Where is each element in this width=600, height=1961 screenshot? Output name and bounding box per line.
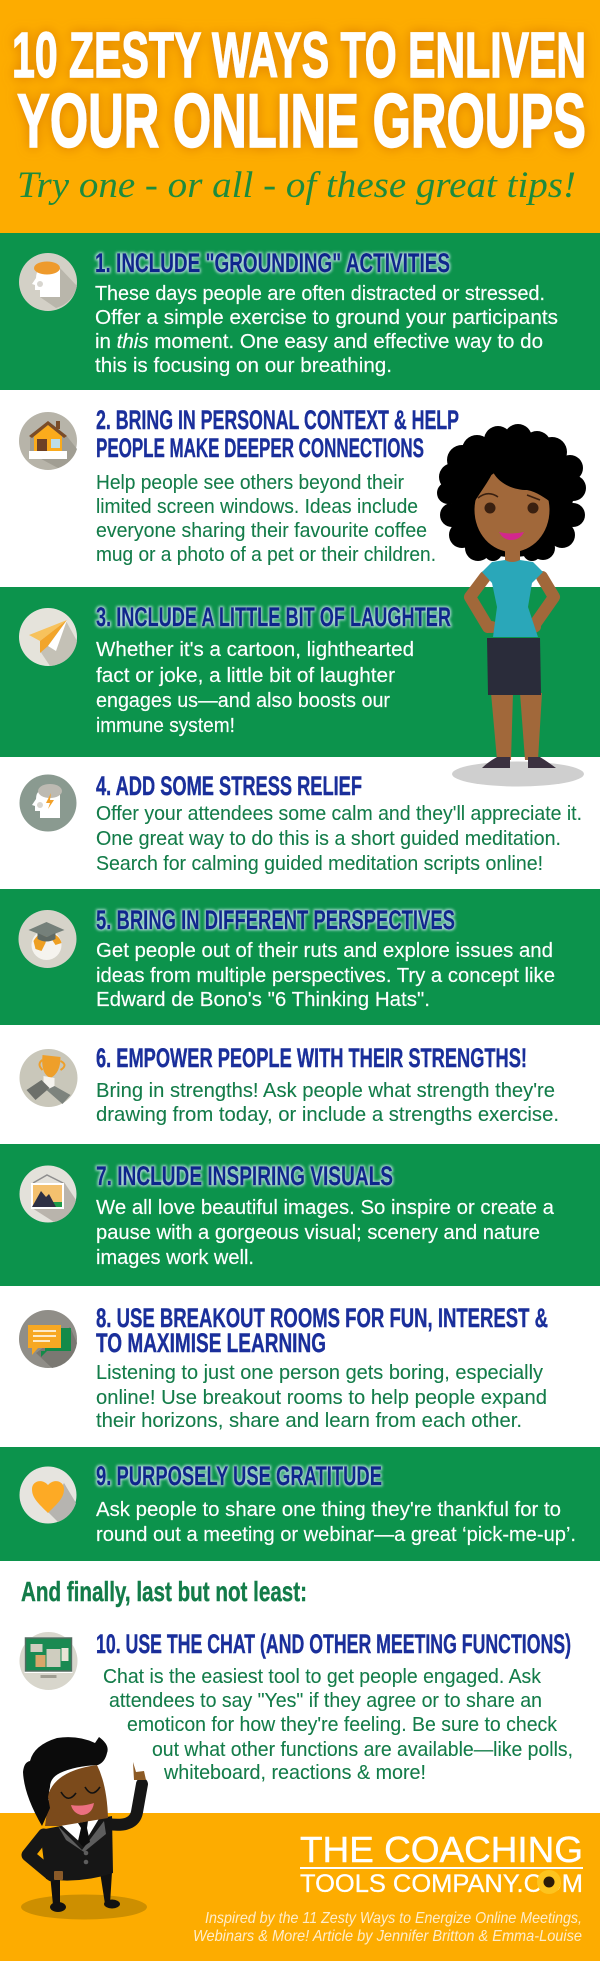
body text: Offer your attendees some calm and they'll appreciate it. — [96, 802, 582, 825]
icon: chat bubbles — [19, 1310, 77, 1368]
heading: 7. INCLUDE INSPIRING VISUALS — [96, 1161, 393, 1191]
body text — [96, 802, 582, 875]
body text: Bring in strengths! Ask people what strength they're — [96, 1079, 555, 1102]
body text: whiteboard, reactions & more! — [163, 1761, 426, 1784]
character: man — [21, 1737, 147, 1920]
body text: emoticon for how they're feeling. Be sure to check — [127, 1713, 558, 1736]
body text: We all love beautiful images. So inspire or create a — [96, 1196, 555, 1219]
logo: TOOLS COMPANY.COM — [300, 1870, 583, 1898]
body text: this is focusing on our breathing. — [95, 354, 392, 377]
body text: round out a meeting or webinar—a great ‘pick-me-up’. — [96, 1523, 576, 1546]
body text — [103, 1665, 573, 1784]
icon: head with brain — [19, 253, 77, 311]
panel: tip 9 — [0, 1447, 600, 1561]
body text: out what other functions are available—like polls, — [152, 1738, 573, 1761]
tagline: Try one - or all - of these great tips! — [17, 165, 576, 206]
body text: limited screen windows. Ideas include — [96, 495, 418, 518]
panel: tip 1 — [0, 233, 600, 390]
body text: engages us—and also boosts our — [96, 689, 390, 712]
body text — [96, 1498, 576, 1546]
body text: fact or joke, a little bit of laughter — [96, 664, 395, 687]
body text: Get people out of their ruts and explore issues and — [96, 939, 553, 962]
heading: 1. INCLUDE "GROUNDING" ACTIVITIES — [95, 248, 450, 278]
icon: globe with graduation cap — [18, 910, 76, 968]
body text: Chat is the easiest tool to get people engaged. Ask — [103, 1665, 542, 1688]
body text — [95, 282, 558, 377]
body text: ideas from multiple perspectives. Try a concept like — [96, 964, 555, 987]
body text: pause with a gorgeous visual; scenery and nature — [96, 1221, 540, 1244]
header panel — [0, 0, 600, 234]
body text: Whether it's a cartoon, lighthearted — [96, 638, 414, 661]
subheading: And finally, last but not least: — [21, 1576, 307, 1607]
heading: TO MAXIMISE LEARNING — [96, 1328, 326, 1358]
heading: 4. ADD SOME STRESS RELIEF — [96, 771, 362, 801]
logo: THE COACHING — [300, 1829, 583, 1870]
body text — [96, 471, 436, 566]
icon: monitor — [20, 1632, 78, 1690]
credit text — [193, 1910, 582, 1945]
body text: mug or a photo of a pet or their children. — [96, 543, 436, 566]
body text: everyone sharing their favourite coffee — [96, 519, 427, 542]
body text — [96, 939, 555, 1011]
icon: paper plane — [19, 608, 77, 666]
icon: house — [19, 412, 77, 470]
character: woman — [437, 424, 586, 786]
panel: tip 10 — [20, 1629, 573, 1784]
body text: Edward de Bono's "6 Thinking Hats". — [96, 988, 430, 1011]
footer panel — [0, 1813, 600, 1961]
icon: heart — [20, 1466, 76, 1524]
body text — [96, 1361, 547, 1432]
heading — [96, 405, 459, 463]
icon: trophy and handshake — [20, 1049, 78, 1107]
icon: head with storm cloud — [20, 774, 76, 832]
heading — [96, 1303, 548, 1358]
body text: online! Use breakout rooms to help people expand — [96, 1386, 547, 1409]
panel: tip 7 — [0, 1144, 600, 1286]
body text: drawing from today, or include a strengths exercise. — [96, 1103, 559, 1126]
body text: Listening to just one person gets boring, especially — [96, 1361, 544, 1384]
panel: tip 8 — [19, 1303, 548, 1432]
panel: tip 4 — [20, 771, 582, 875]
body text: Search for calming guided meditation scripts online! — [96, 852, 543, 875]
body text: their horizons, share and learn from each other. — [96, 1409, 522, 1432]
title — [12, 19, 586, 164]
heading: 9. PURPOSELY USE GRATITUDE — [96, 1461, 382, 1491]
panel: tip 6 — [20, 1043, 559, 1126]
body text: Ask people to share one thing they're thankful for to — [96, 1498, 561, 1521]
body text: Help people see others beyond their — [96, 471, 404, 494]
body text: images work well. — [96, 1246, 254, 1269]
icon: sunflower — [537, 1870, 561, 1894]
body text — [96, 1079, 559, 1126]
body text: immune system! — [96, 714, 235, 737]
panel: tip 3 — [0, 587, 600, 757]
icon: framed landscape picture — [20, 1166, 76, 1222]
body text: in this moment. One easy and effective way to do — [95, 330, 543, 353]
panel: tip 5 — [0, 889, 600, 1025]
body text: These days people are often distracted or stressed. — [95, 282, 545, 305]
body text: attendees to say "Yes" if they agree or to share an — [109, 1689, 542, 1712]
body text: One great way to do this is a short guided meditation. — [96, 827, 561, 850]
body text — [96, 1196, 555, 1269]
panel: tip 2 — [19, 405, 459, 566]
body text: Offer a simple exercise to ground your participants — [95, 306, 558, 329]
body text — [96, 638, 414, 737]
logo — [300, 1829, 583, 1898]
